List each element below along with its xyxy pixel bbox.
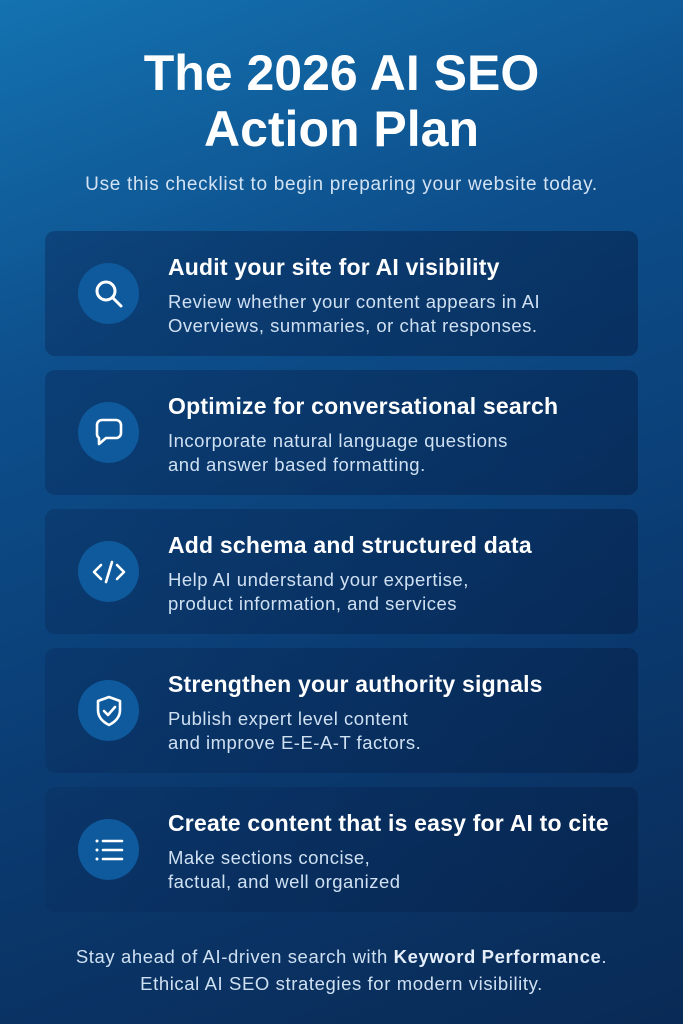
icon: chat [78, 402, 139, 463]
text: Review whether your content appears in AI [168, 291, 540, 312]
title: Action Plan [204, 101, 479, 157]
title: The 2026 AI SEO [144, 45, 539, 101]
text [168, 430, 508, 475]
heading: Create content that is easy for AI to cite [168, 810, 609, 836]
text: and improve E-E-A-T factors. [168, 732, 421, 753]
text: Overviews, summaries, or chat responses. [168, 315, 538, 336]
heading: Audit your site for AI visibility [168, 254, 500, 280]
text: factual, and well organized [168, 871, 401, 892]
subtitle: Use this checklist to begin preparing your website today. [85, 174, 598, 195]
text: product information, and services [168, 593, 457, 614]
panel: cite [45, 787, 638, 912]
text [168, 291, 540, 336]
heading: Optimize for conversational search [168, 393, 558, 419]
icon: list [78, 819, 139, 880]
title [144, 45, 539, 157]
footer: Stay ahead of AI-driven search with Keyword Performance. [76, 946, 607, 967]
panel: authority [45, 648, 638, 773]
heading: Strengthen your authority signals [168, 671, 543, 697]
text: Incorporate natural language questions [168, 430, 508, 451]
text [168, 569, 469, 614]
text [168, 847, 401, 892]
icon: code [78, 541, 139, 602]
text: Make sections concise, [168, 847, 370, 868]
panel: audit [45, 231, 638, 356]
text: Publish expert level content [168, 708, 408, 729]
icon: shield [78, 680, 139, 741]
footer [76, 946, 607, 994]
panel: conversational [45, 370, 638, 495]
heading: Add schema and structured data [168, 532, 532, 558]
panel: schema [45, 509, 638, 634]
icon: search [78, 263, 139, 324]
footer: Ethical AI SEO strategies for modern visibility. [140, 973, 543, 994]
text [168, 708, 421, 753]
text: Help AI understand your expertise, [168, 569, 469, 590]
text: and answer based formatting. [168, 454, 426, 475]
